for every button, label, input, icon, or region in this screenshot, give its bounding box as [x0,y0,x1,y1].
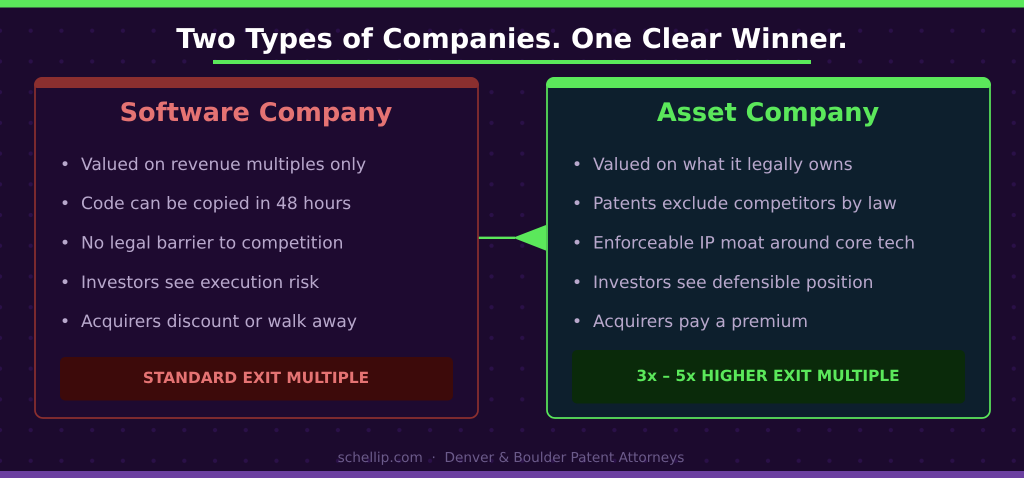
panel: asset company [546,77,991,418]
bullet list: • [60,155,70,175]
bullet list: Patents exclude competitors by law [593,194,897,214]
bullet list: Acquirers pay a premium [593,312,808,332]
top accent bar [0,0,1024,8]
bullet list: Acquirers discount or walk away [81,312,357,332]
bullet list: • [572,234,582,254]
badge: higher exit multiple: 3x – 5x HIGHER EXIT MULTIPLE [636,367,900,385]
bullet list: • [572,273,582,293]
bullet list: • [572,312,582,332]
bullet list: Valued on revenue multiples only [81,155,366,175]
footer text: schellip.com · Denver & Boulder Patent Attorneys [338,450,684,466]
bullet list: Investors see execution risk [81,273,319,293]
panel: software company [34,77,479,418]
bullet list [572,155,915,332]
title: Two Types of Companies. One Clear Winner. [176,24,848,55]
badge: standard exit multiple: STANDARD EXIT MULTIPLE [143,369,369,387]
panel heading: Asset Company [657,98,879,128]
bullet list: • [60,273,70,293]
bullet list: • [572,194,582,214]
bottom accent bar [0,471,1024,478]
bullet list: • [60,312,70,332]
bullet list: Investors see defensible position [593,273,873,293]
panel header bar [34,77,479,88]
bullet list: • [60,194,70,214]
bullet list: Valued on what it legally owns [593,155,853,175]
connector arrow [478,225,546,251]
badge: standard exit multiple [60,357,453,400]
panel background [547,78,990,418]
title underline [213,60,811,64]
panel heading: Software Company [120,98,393,128]
bullet list: Code can be copied in 48 hours [81,194,351,214]
bullet list: No legal barrier to competition [81,234,343,254]
bullet list: • [572,155,582,175]
bullet list [60,155,366,332]
bullet list: Enforceable IP moat around core tech [593,234,915,254]
badge: higher exit multiple [572,350,965,404]
panel background [35,78,478,418]
panel header bar [546,77,991,88]
bullet list: • [60,234,70,254]
